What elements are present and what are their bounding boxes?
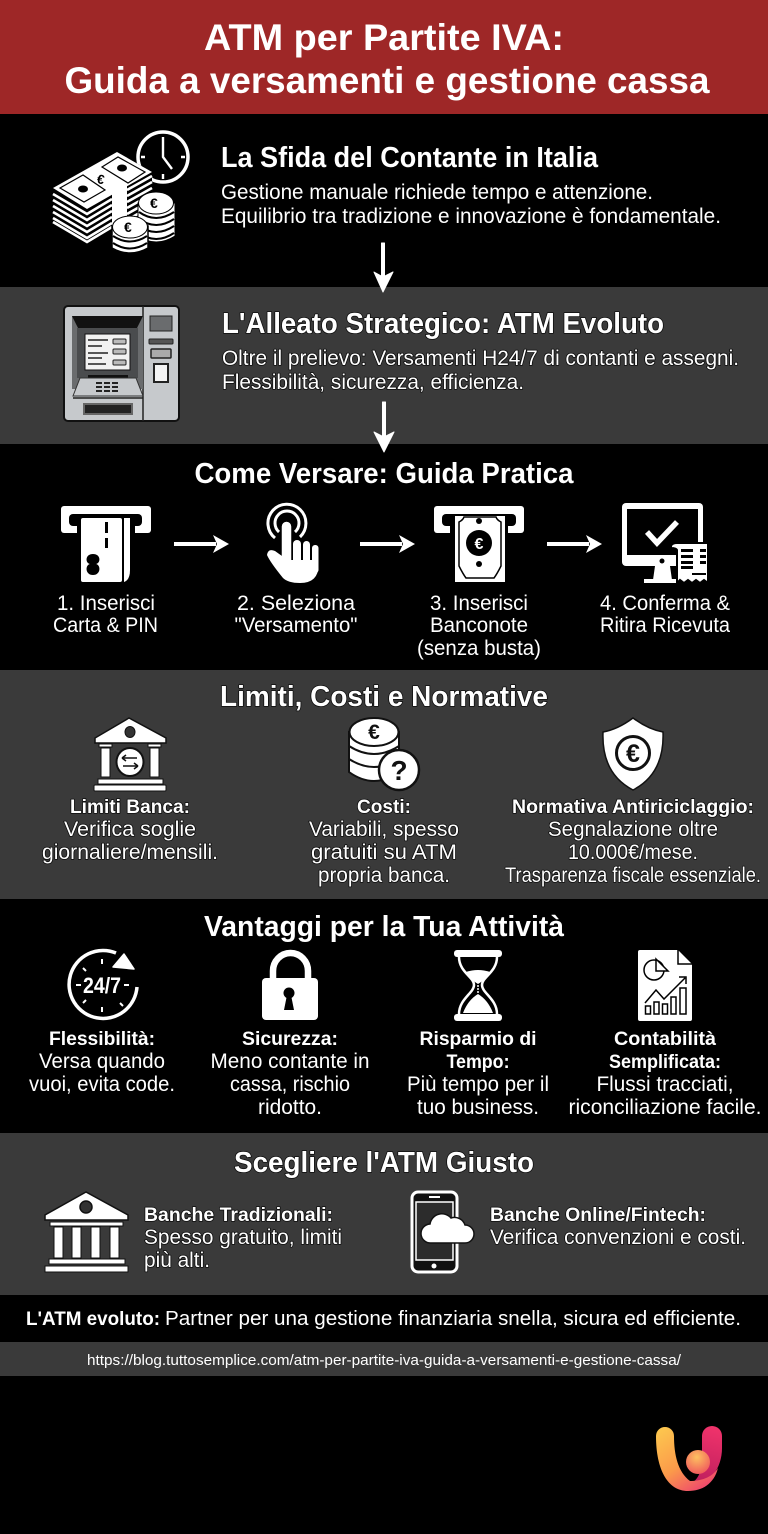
logo (656, 1426, 722, 1491)
icon: coins with question mark: ? (390, 755, 408, 786)
text block: Limiti Banca: (70, 796, 190, 818)
text block: Risparmio di (420, 1028, 536, 1050)
text block: tuo business. (417, 1096, 539, 1119)
icon: monitor with check and receipt (622, 503, 708, 583)
text block: Normativa Antiriciclaggio: (512, 796, 754, 818)
text block: Flussi tracciati, (596, 1073, 734, 1096)
text block: Gestione manuale richiede tempo e attenzione. (221, 181, 653, 204)
text block: Verifica convenzioni e costi. (490, 1226, 746, 1249)
column: flessibilita (29, 950, 175, 1096)
arrow: alleato to guida (374, 402, 394, 452)
closing statement: Partner per una gestione finanziaria snella, sicura ed efficiente. (165, 1308, 741, 1330)
column: limiti banca (42, 718, 218, 864)
text block: Sicurezza: (242, 1028, 338, 1050)
option: banche tradizionali (45, 1192, 342, 1272)
source url bar (0, 1342, 768, 1376)
text block: propria banca. (318, 864, 450, 887)
text block: vuoi, evita code. (29, 1073, 175, 1096)
text block: gratuiti su ATM (311, 841, 457, 864)
heading: L'Alleato Strategico: ATM Evoluto (222, 308, 664, 340)
icon: cash stacks, coins and clock: € (96, 171, 106, 187)
text block: Banche Online/Fintech: (490, 1204, 706, 1226)
text block (505, 796, 761, 887)
text block (42, 796, 218, 864)
icon: banknote in slot: € (475, 536, 484, 553)
step 3 (417, 506, 541, 660)
icon: bank with transfer arrows (94, 718, 166, 791)
arrow: step 1 to 2 (174, 535, 229, 553)
label (53, 592, 158, 637)
text block: Oltre il prelievo: Versamenti H24/7 di contanti e assegni. (222, 347, 739, 370)
label: Carta & PIN (53, 614, 158, 637)
text block: ridotto. (258, 1096, 322, 1119)
text block: riconciliazione facile. (568, 1096, 762, 1119)
icon: bank (45, 1192, 128, 1272)
title (64, 17, 710, 101)
source url bar: https://blog.tuttosemplice.com/atm-per-partite-iva-guida-a-versamenti-e-gestione-cassa/ (87, 1352, 682, 1369)
icon: report document (638, 950, 692, 1021)
panel: alleato strategico (0, 287, 768, 444)
text block: Costi: (357, 796, 411, 818)
option: banche online (412, 1192, 746, 1272)
label (600, 592, 730, 637)
panel: limiti, costi e normative (0, 670, 768, 899)
text block: Variabili, spesso (309, 818, 459, 841)
icon: cash stacks, coins and clock (53, 132, 188, 253)
icon: phone with cloud (412, 1192, 474, 1272)
text block (221, 181, 721, 228)
arrow: sfida to alleato (374, 243, 393, 292)
text block: Più tempo per il (407, 1073, 549, 1096)
label: "Versamento" (234, 614, 358, 637)
text block: Banche Tradizionali: (144, 1204, 333, 1226)
column: normativa antiriciclaggio (505, 718, 761, 887)
icon: ATM machine (64, 306, 179, 421)
text block: Segnalazione oltre (548, 818, 718, 841)
closing statement: L'ATM evoluto: (26, 1308, 160, 1330)
text block (568, 1028, 762, 1119)
icon: coins with question mark (349, 718, 419, 790)
title: Guida a versamenti e gestione cassa (64, 60, 710, 101)
icon: 24/7 clock (69, 950, 137, 1018)
icon: coins with question mark: € (368, 721, 380, 744)
text block: Flessibilità, sicurezza, efficienza. (222, 371, 524, 394)
label: (senza busta) (417, 637, 541, 660)
text block (144, 1204, 342, 1272)
text block (407, 1028, 549, 1119)
text block: Flessibilità: (49, 1028, 155, 1050)
text block: Versa quando (39, 1050, 165, 1073)
text block: cassa, rischio (230, 1073, 350, 1096)
heading: Vantaggi per la Tua Attività (204, 911, 564, 943)
text block: più alti. (144, 1249, 210, 1272)
step 1 (53, 506, 158, 637)
text block: Semplificata: (609, 1051, 721, 1073)
heading: La Sfida del Contante in Italia (221, 142, 599, 174)
text block: Contabilità (614, 1028, 716, 1050)
label: 2. Seleziona (237, 592, 355, 615)
step 4 (600, 503, 730, 637)
icon: finger tap (267, 504, 318, 583)
column: costi (309, 718, 459, 887)
panel: vantaggi (0, 899, 768, 1133)
label: 3. Inserisci (430, 592, 528, 615)
text block (490, 1204, 746, 1249)
text block: Spesso gratuito, limiti (144, 1226, 342, 1249)
panel: scegliere l'ATM giusto (0, 1133, 768, 1295)
label: 4. Conferma & (600, 592, 730, 615)
heading: Limiti, Costi e Normative (220, 681, 548, 713)
icon: cash stacks, coins and clock: € (150, 195, 158, 211)
label: 1. Inserisci (57, 592, 155, 615)
column: risparmio di tempo (407, 950, 549, 1119)
label (234, 592, 358, 637)
text block (29, 1028, 175, 1096)
panel: la sfida del contante (0, 115, 768, 287)
text block: giornaliere/mensili. (42, 841, 218, 864)
icon: shield with euro (603, 718, 663, 790)
icon: card in slot (61, 506, 151, 582)
text block: Tempo: (446, 1051, 510, 1073)
text block (210, 1028, 370, 1119)
text block: Meno contante in (210, 1050, 370, 1073)
heading: Come Versare: Guida Pratica (194, 458, 575, 490)
header banner (0, 0, 768, 114)
icon: banknote in slot (434, 506, 524, 582)
column: contabilita (568, 950, 762, 1119)
heading: Scegliere l'ATM Giusto (234, 1147, 534, 1179)
icon: cash stacks, coins and clock: € (124, 219, 132, 235)
icon: shield with euro: € (626, 740, 640, 768)
label: Banconote (430, 614, 528, 637)
icon: padlock (262, 953, 318, 1020)
column: sicurezza (210, 953, 370, 1119)
label (417, 592, 541, 660)
label: Ritira Ricevuta (600, 614, 730, 637)
text block: Equilibrio tra tradizione e innovazione è fondamentale. (221, 205, 721, 228)
arrow: step 2 to 3 (360, 535, 415, 553)
text block (222, 347, 739, 394)
step 2 (234, 504, 358, 637)
title: ATM per Partite IVA: (204, 17, 564, 58)
text block (309, 796, 459, 887)
panel: come versare (0, 444, 768, 670)
arrow: step 3 to 4 (547, 535, 602, 553)
icon: 24/7 clock: 24/7 (83, 973, 121, 998)
text block: Verifica soglie (64, 818, 196, 841)
text block: 10.000€/mese. (568, 841, 698, 864)
icon: hourglass (454, 950, 502, 1021)
